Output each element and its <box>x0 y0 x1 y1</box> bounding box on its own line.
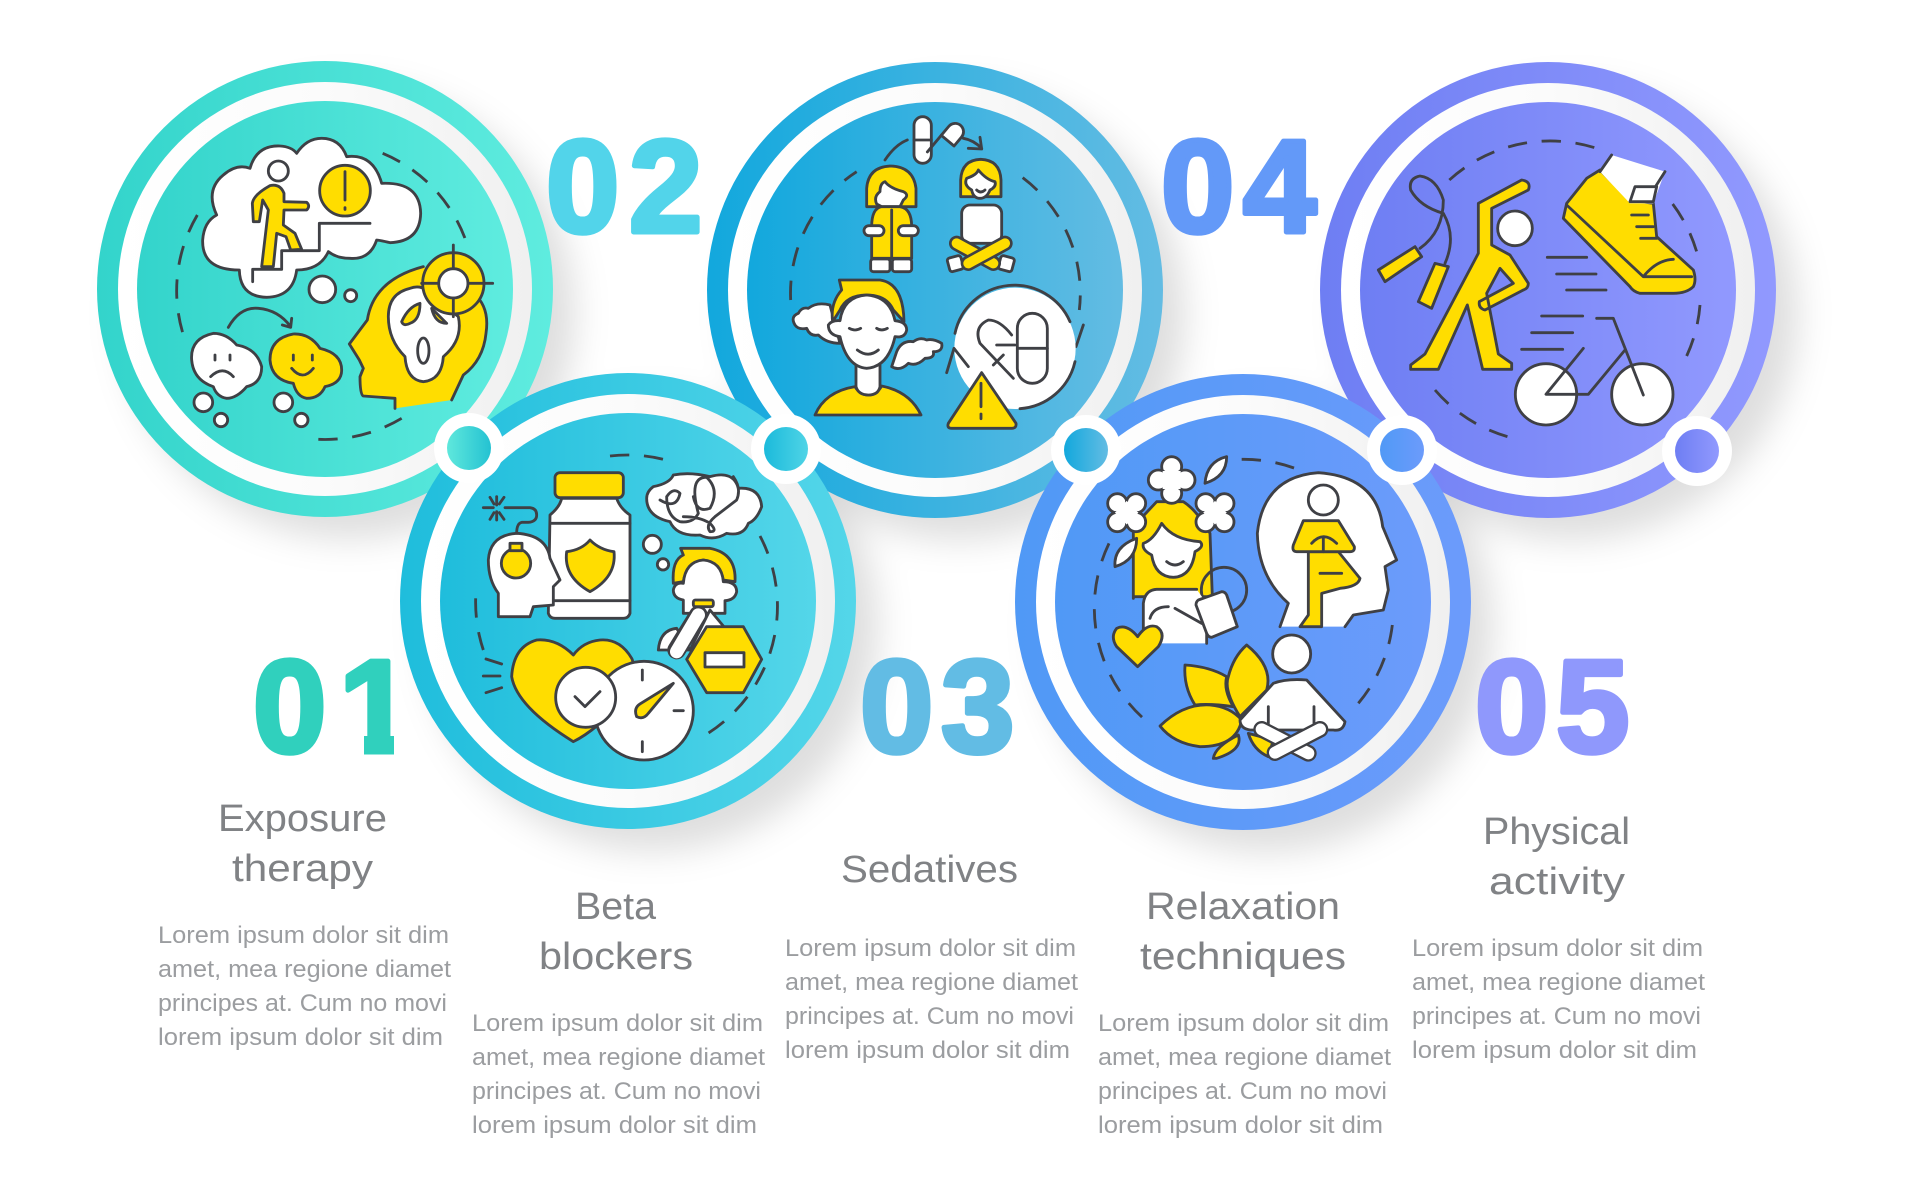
text block: sedatives: lorem ipsum dolor sit dim <box>785 1037 1070 1064</box>
text block: beta blockers: Lorem ipsum dolor sit dim <box>472 1010 763 1037</box>
panel: exposure therapy circle <box>97 61 553 517</box>
text block: relaxation techniques: lorem ipsum dolor sit dim <box>1098 1112 1383 1139</box>
text block: relaxation techniques: principes at. Cum no movi <box>1098 1078 1387 1105</box>
icon: physical activity <box>1378 141 1700 437</box>
panel: relaxation techniques circle <box>1015 374 1471 830</box>
heading: physical activity <box>1483 811 1630 903</box>
text block: sedatives <box>785 935 1078 1064</box>
text block: beta blockers: amet, mea regione diamet <box>472 1044 765 1071</box>
text block: sedatives: principes at. Cum no movi <box>785 1003 1074 1030</box>
text block: relaxation techniques <box>1098 1010 1391 1139</box>
connector dot 2 <box>751 414 821 484</box>
connector dot 5 <box>1662 416 1732 486</box>
number 01 <box>256 657 394 756</box>
heading: exposure therapy: Exposure <box>218 798 387 840</box>
heading: relaxation techniques <box>1140 886 1346 978</box>
text block: sedatives: amet, mea regione diamet <box>785 969 1078 996</box>
panel: beta blockers circle <box>400 373 856 829</box>
text block: exposure therapy: amet, mea regione diamet <box>158 956 451 983</box>
panel: physical activity circle <box>1320 62 1776 518</box>
text block: exposure therapy: Lorem ipsum dolor sit dim <box>158 922 449 949</box>
heading: relaxation techniques: Relaxation <box>1146 886 1340 928</box>
heading: exposure therapy: therapy <box>232 848 373 890</box>
drop shadows <box>123 87 1798 852</box>
text block: physical activity: amet, mea regione diamet <box>1412 969 1705 996</box>
text block: exposure therapy <box>158 922 451 1051</box>
number 01: 1 <box>339 633 412 780</box>
icon: relaxation techniques <box>1094 457 1397 758</box>
text block: relaxation techniques: Lorem ipsum dolor sit dim <box>1098 1010 1389 1037</box>
number 01: 0 <box>253 633 326 780</box>
number 02: 02 <box>546 113 702 260</box>
heading: beta blockers: Beta <box>575 886 657 928</box>
connector dot 3 <box>1051 415 1121 485</box>
text block: beta blockers <box>472 1010 765 1139</box>
connector dot 4 <box>1367 415 1437 485</box>
text block: beta blockers: lorem ipsum dolor sit dim <box>472 1112 757 1139</box>
icon: sedatives <box>791 117 1083 428</box>
text block: physical activity: lorem ipsum dolor sit dim <box>1412 1037 1697 1064</box>
text block: sedatives: Lorem ipsum dolor sit dim <box>785 935 1076 962</box>
panel: sedatives circle <box>707 62 1163 518</box>
heading: physical activity: Physical <box>1483 811 1630 853</box>
text block: beta blockers: principes at. Cum no movi <box>472 1078 761 1105</box>
heading: physical activity: activity <box>1489 861 1625 903</box>
text block: physical activity: principes at. Cum no movi <box>1412 1003 1701 1030</box>
heading: beta blockers <box>539 886 693 978</box>
icon: beta blockers <box>476 455 777 760</box>
text block: physical activity <box>1412 935 1705 1064</box>
text block: relaxation techniques: amet, mea regione diamet <box>1098 1044 1391 1071</box>
heading: sedatives: Sedatives <box>841 849 1018 891</box>
connector dot 1 <box>434 413 504 483</box>
heading: relaxation techniques: techniques <box>1140 936 1346 978</box>
number 05: 05 <box>1475 633 1629 780</box>
text block: exposure therapy: principes at. Cum no movi <box>158 990 447 1017</box>
text block: physical activity: Lorem ipsum dolor sit dim <box>1412 935 1703 962</box>
heading: beta blockers: blockers <box>539 936 693 978</box>
number 04: 04 <box>1161 113 1316 260</box>
heading: exposure therapy <box>218 798 387 890</box>
icon: exposure therapy <box>177 138 493 439</box>
text block: exposure therapy: lorem ipsum dolor sit dim <box>158 1024 443 1051</box>
number 03: 03 <box>860 633 1014 780</box>
